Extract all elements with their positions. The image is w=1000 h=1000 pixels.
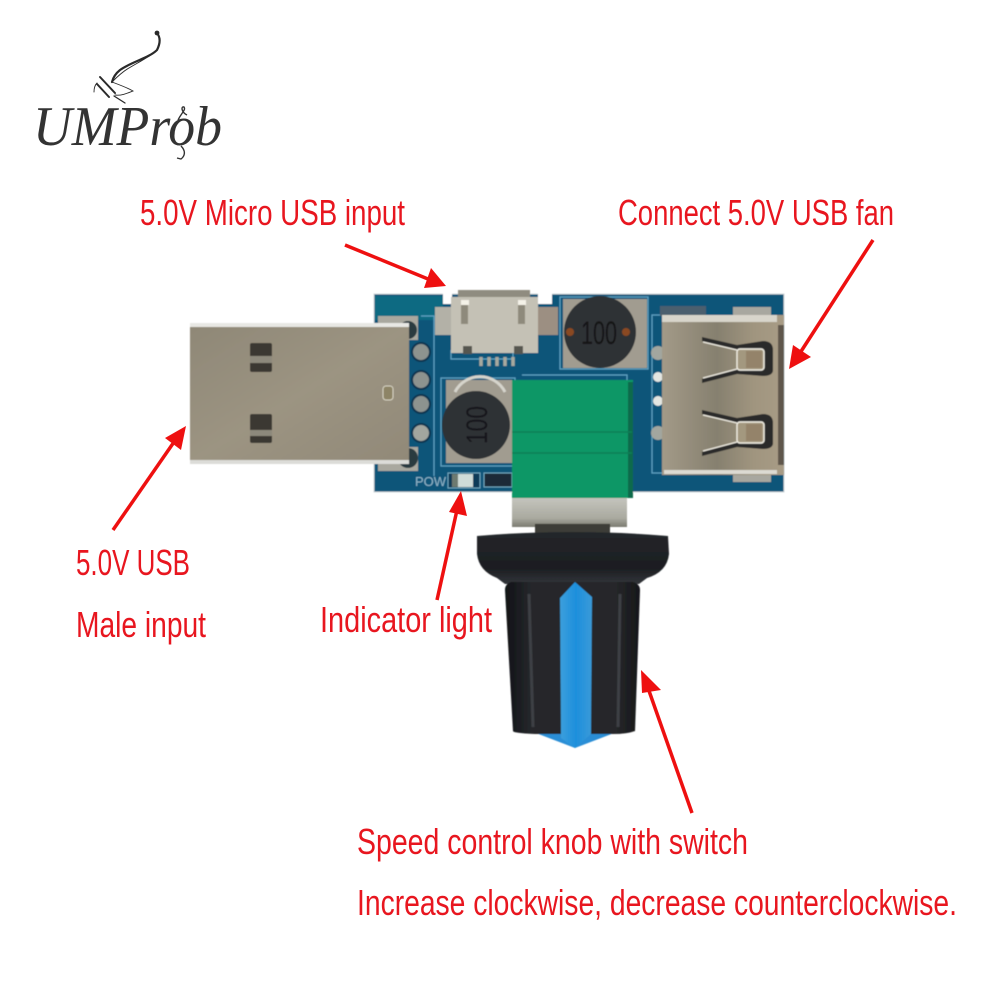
icon: feather quill bbox=[94, 31, 160, 103]
through-hole pads bbox=[378, 316, 430, 471]
label: USB male input: 5.0V USB bbox=[76, 542, 190, 583]
socket clip upper bbox=[702, 337, 773, 383]
label: indicator light: Indicator light bbox=[320, 599, 492, 640]
arrow: to micro USB bbox=[345, 245, 446, 288]
silkscreen POW: POW bbox=[415, 474, 447, 489]
speed control knob bbox=[477, 524, 669, 748]
inductor bottom bbox=[442, 377, 514, 463]
micro USB connector bbox=[435, 290, 558, 366]
USB female socket bbox=[651, 306, 784, 482]
arrow: to USB fan socket bbox=[789, 240, 873, 369]
USB male plug bbox=[190, 323, 409, 464]
logo swash bbox=[177, 107, 187, 159]
circuit board bbox=[190, 285, 784, 527]
label: connect USB fan: Connect 5.0V USB fan bbox=[618, 192, 894, 233]
inductor bottom: 100 bbox=[461, 406, 494, 444]
knob shaft bbox=[535, 524, 610, 538]
label: micro USB input: 5.0V Micro USB input bbox=[140, 192, 405, 233]
logo: UMProb bbox=[33, 31, 222, 159]
PCB base bbox=[374, 294, 784, 492]
potentiometer green housing bbox=[512, 380, 633, 527]
resistor bbox=[484, 473, 512, 487]
inductor top bbox=[563, 296, 647, 368]
label: male input: Male input bbox=[76, 604, 206, 645]
arrow: to knob bbox=[641, 670, 692, 813]
trace outlines bbox=[421, 297, 672, 493]
arrow: to indicator light bbox=[437, 491, 467, 600]
blue stripe bbox=[560, 582, 592, 748]
knob cap bbox=[477, 532, 669, 584]
blue tip bbox=[528, 730, 622, 748]
knob body bbox=[505, 582, 640, 734]
arrow: to USB male plug bbox=[113, 426, 186, 530]
socket clip lower bbox=[702, 410, 773, 456]
label: speed control knob: Speed control knob with switch bbox=[357, 821, 748, 862]
logo wordmark: UMProb bbox=[33, 96, 222, 158]
metal mount bbox=[512, 498, 627, 527]
indicator LED bbox=[448, 473, 480, 488]
inductor top: 100 bbox=[581, 315, 617, 351]
